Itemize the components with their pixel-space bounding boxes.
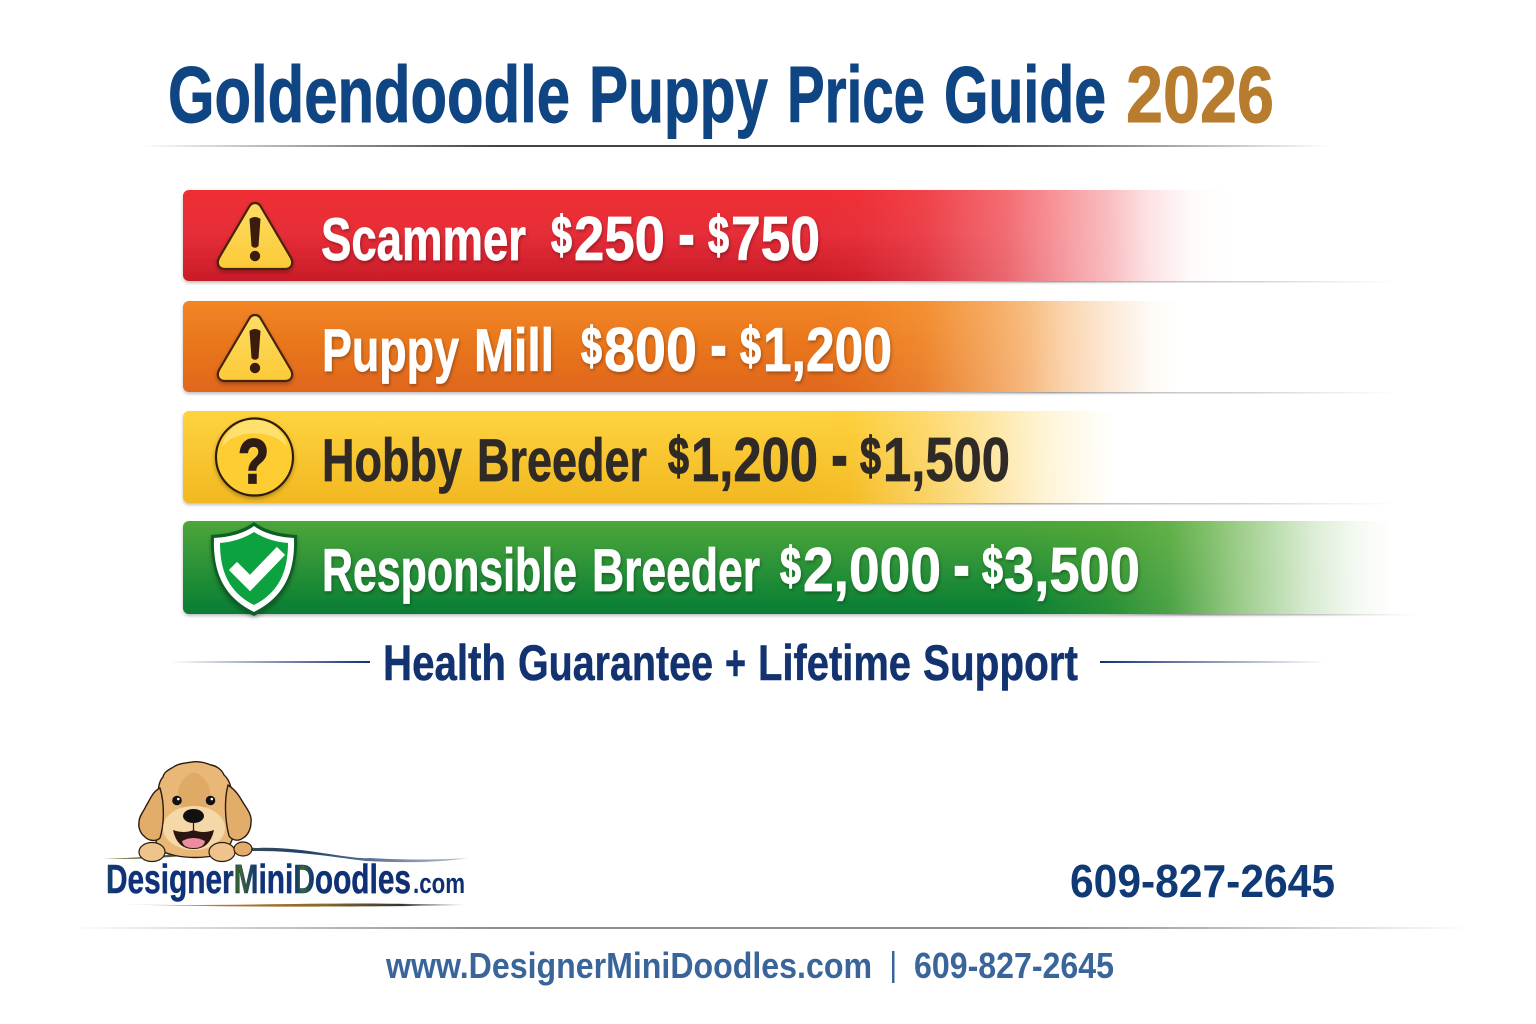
title: Puppy: [589, 50, 768, 139]
price: scammer: $: [551, 206, 572, 265]
icon: question mark: ?: [238, 427, 269, 497]
title: [168, 50, 1274, 139]
price: responsible breeder: $: [780, 537, 801, 596]
title: Price: [787, 50, 925, 139]
price: hobby breeder: 1,200: [691, 426, 818, 495]
label: scammer: Scammer: [321, 206, 526, 273]
icon: question mark: [216, 418, 293, 497]
price: scammer: -: [678, 189, 695, 277]
price: puppy mill: $: [740, 317, 761, 376]
footer contact line: 609-827-2645: [914, 945, 1114, 986]
title: Guide: [944, 50, 1106, 139]
price: hobby breeder: [668, 410, 1010, 498]
tagline: [170, 635, 1325, 691]
price: hobby breeder: 1,500: [883, 426, 1010, 495]
tagline: Guarantee: [518, 635, 713, 691]
label: puppy mill: Puppy: [322, 317, 459, 384]
tagline: +: [725, 635, 746, 691]
bar: scammer: [183, 189, 1400, 282]
price: puppy mill: 800: [604, 316, 697, 385]
price: responsible breeder: 2,000: [803, 536, 941, 605]
title: 2026: [1126, 50, 1274, 139]
price: puppy mill: [581, 300, 892, 388]
bar: responsible breeder: [183, 520, 1420, 616]
tagline: Support: [923, 635, 1078, 691]
label: responsible breeder: Breeder: [592, 537, 760, 604]
price: hobby breeder: -: [831, 410, 848, 498]
price: hobby breeder: $: [860, 427, 881, 486]
title: Goldendoodle: [168, 50, 570, 139]
label: responsible breeder: Responsible: [322, 537, 577, 604]
price: responsible breeder: -: [953, 520, 970, 608]
bar: hobby breeder: [183, 410, 1400, 504]
price: responsible breeder: [780, 520, 1140, 608]
price: scammer: 750: [731, 205, 820, 274]
tagline: Lifetime: [758, 635, 911, 691]
price: hobby breeder: $: [668, 427, 689, 486]
footer contact line: www.DesignerMiniDoodles.com: [385, 945, 872, 986]
price: responsible breeder: 3,500: [1004, 536, 1140, 605]
label: hobby breeder: Breeder: [477, 427, 647, 494]
logo domain: .com: [413, 868, 465, 900]
bar: puppy mill: [183, 300, 1400, 394]
logo wordmark: DesignerMiniDoodles: [106, 856, 411, 902]
icon: shield check: [211, 522, 297, 616]
label: hobby breeder: [322, 427, 647, 494]
phone number: 609-827-2645: [1070, 855, 1335, 907]
label: puppy mill: Mill: [474, 317, 554, 384]
tagline: Health: [383, 635, 506, 691]
price: scammer: 250: [574, 205, 665, 274]
icon: warning triangle: [218, 315, 292, 381]
logo: [104, 762, 468, 907]
price: puppy mill: $: [581, 317, 602, 376]
label: hobby breeder: Hobby: [322, 427, 462, 494]
price: scammer: $: [708, 206, 729, 265]
logo swoosh: [104, 848, 468, 907]
price: responsible breeder: $: [982, 537, 1003, 596]
price: puppy mill: 1,200: [763, 316, 892, 385]
icon: warning triangle: [218, 203, 292, 269]
price: puppy mill: -: [710, 300, 727, 388]
icon: puppy: [139, 762, 252, 862]
price: scammer: [551, 189, 820, 277]
